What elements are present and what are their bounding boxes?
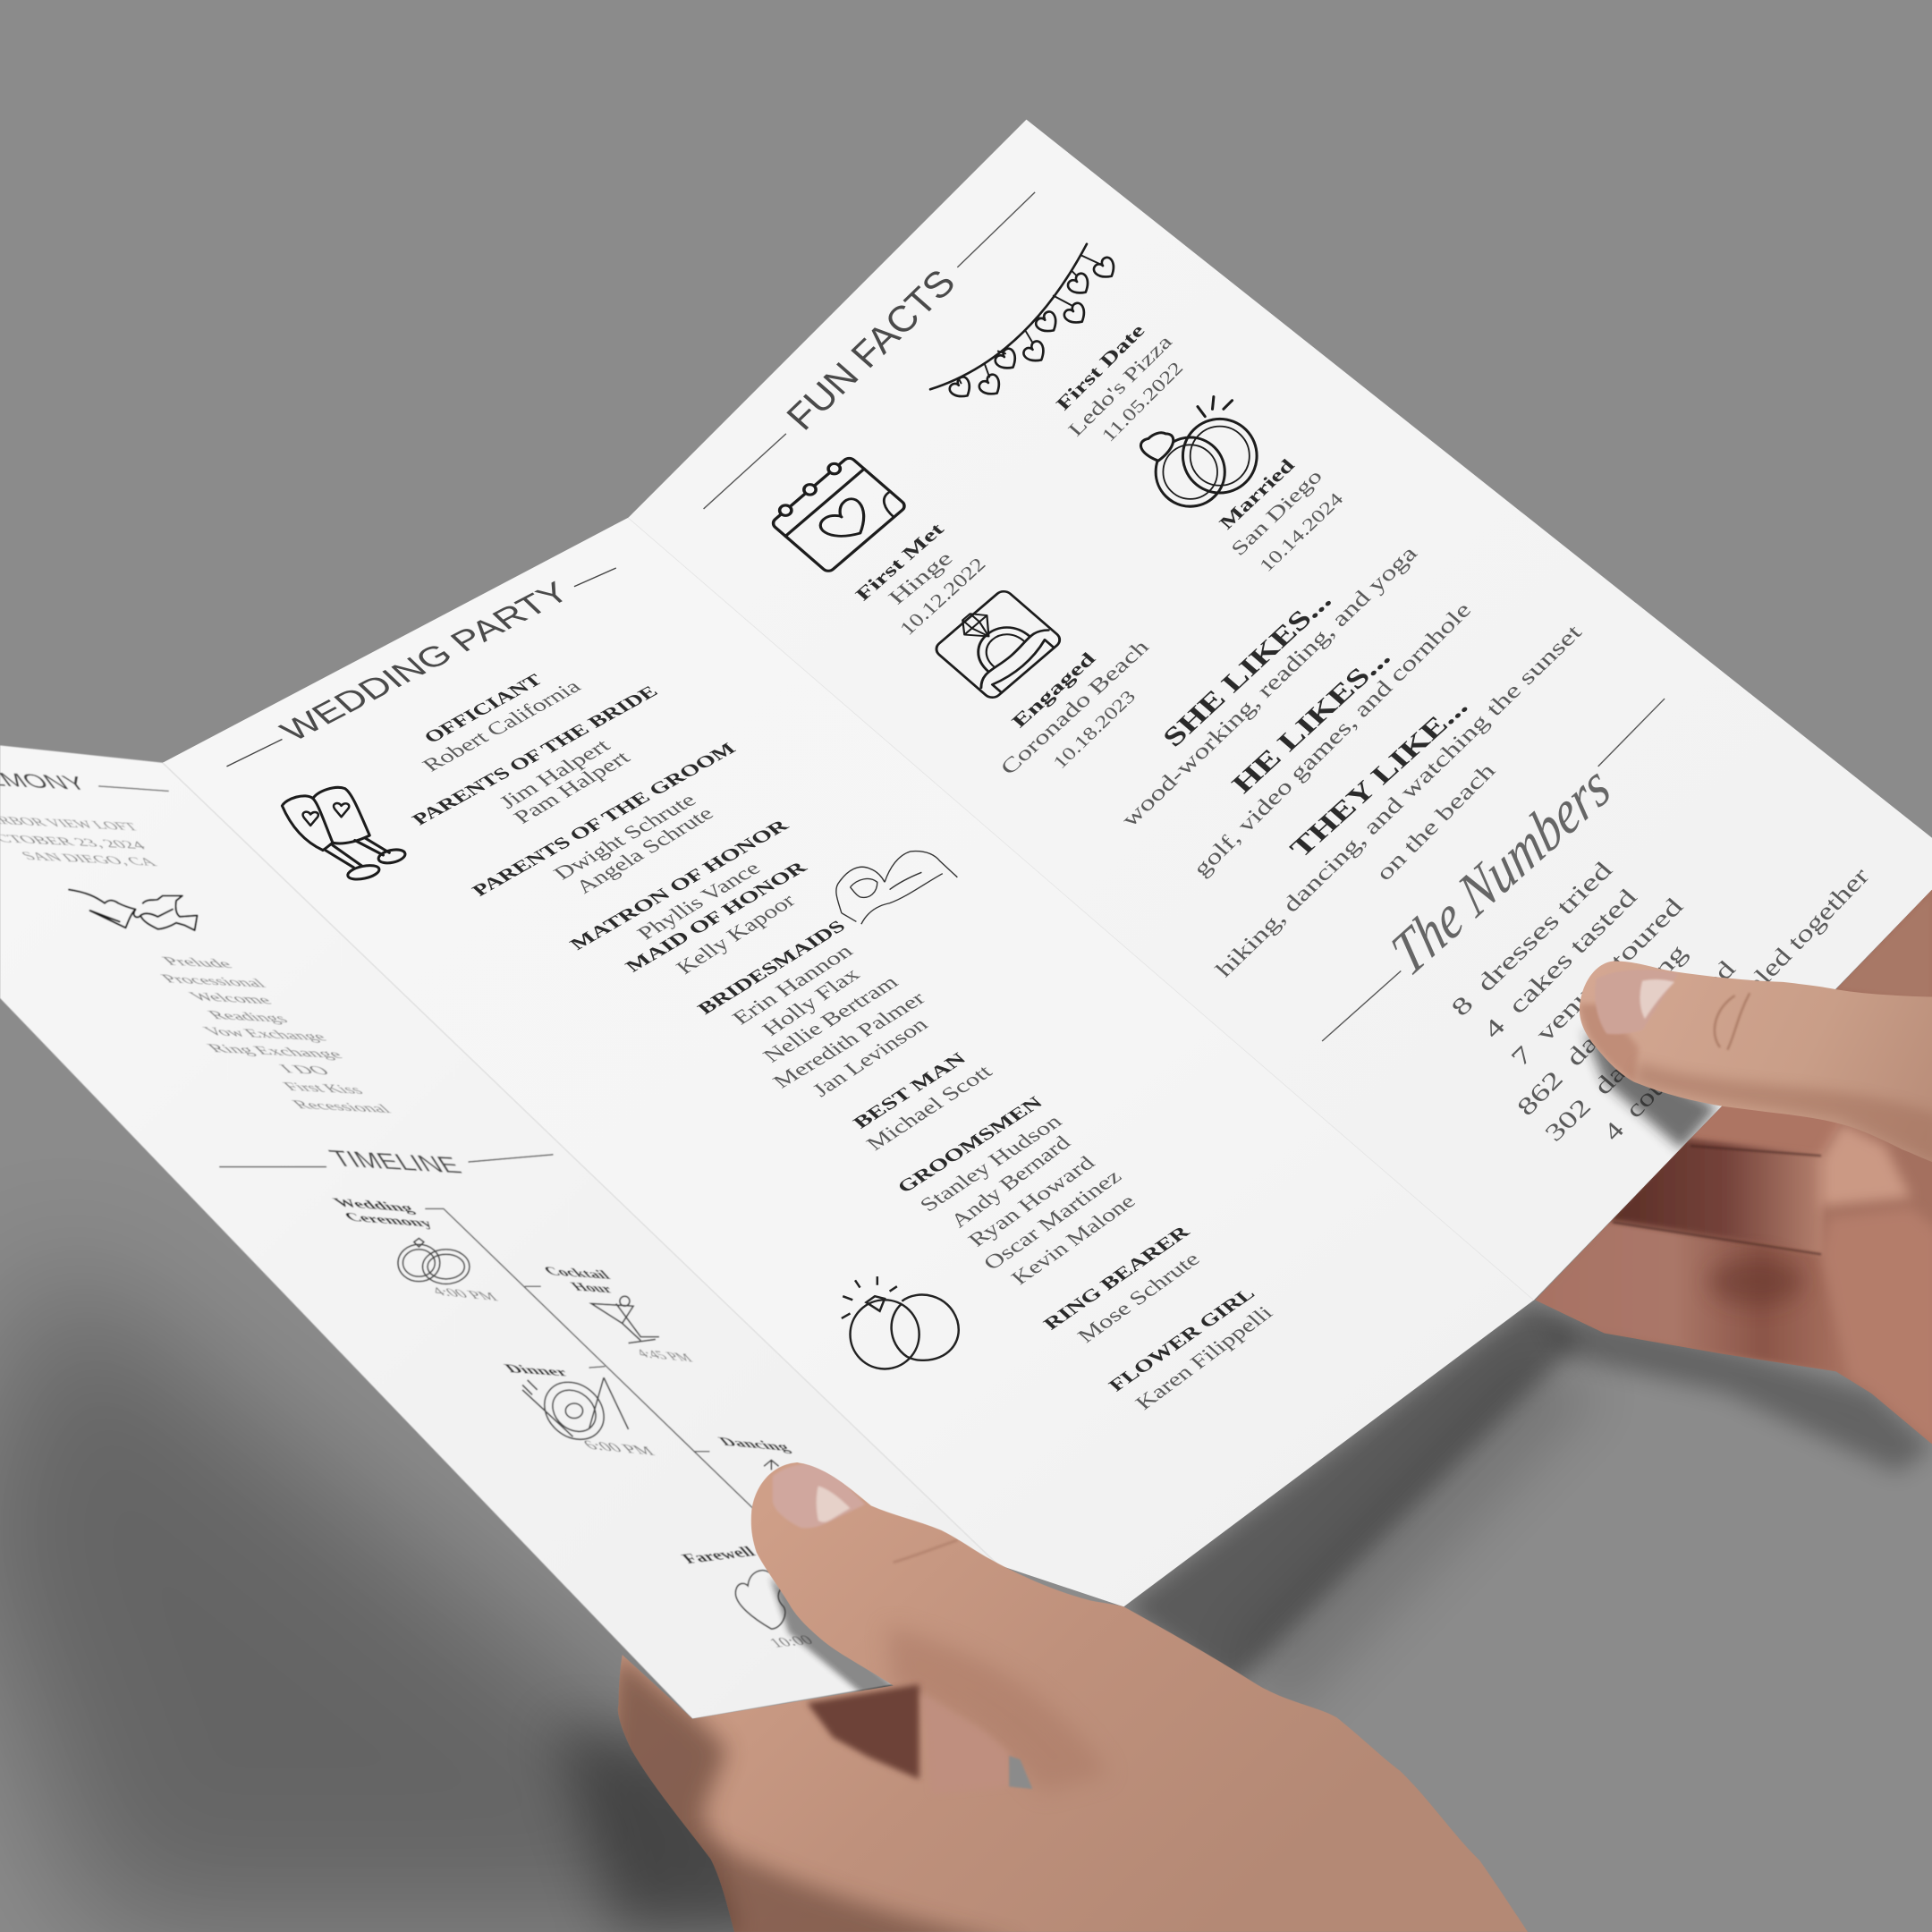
thumbnail — [773, 1464, 865, 1529]
knuckle segment lower — [1821, 1208, 1932, 1454]
venue details — [0, 812, 160, 869]
the numbers list: 4 cakes tasted — [1477, 884, 1642, 1043]
first met: 10.12.2022 — [894, 554, 990, 639]
bridesmaids: Holly Flax — [758, 964, 865, 1040]
event: dinner — [501, 1361, 658, 1459]
icon: calendar heart — [767, 453, 907, 573]
third finger — [1536, 1227, 1819, 1366]
first date — [1053, 321, 1187, 445]
event: wedding ceremony: 4:00 PM — [428, 1284, 502, 1304]
knuckle segment upper — [1821, 1123, 1911, 1207]
married: Married — [1216, 455, 1300, 533]
divider: wedding party left — [226, 740, 282, 767]
parents of the groom: Angela Schrute — [571, 803, 719, 898]
bridesmaids: Nellie Bertram — [758, 972, 903, 1067]
they like: THEY LIKE... — [1284, 692, 1474, 863]
order of service: Recessional — [288, 1098, 395, 1115]
event: cocktail hour: Hour — [567, 1280, 617, 1296]
event: cocktail hour: 4:45 PM — [632, 1346, 697, 1365]
order of service: Processional — [157, 972, 270, 990]
engaged: 10.18.2023 — [1049, 687, 1140, 773]
bridesmaids — [694, 918, 933, 1101]
first date: 11.05.2022 — [1098, 359, 1187, 445]
matron and maid of honor: MAID OF HONOR — [622, 858, 812, 976]
divider: numbers right — [1598, 699, 1665, 767]
married: San Diego — [1226, 465, 1326, 560]
parents of the groom: PARENTS OF THE GROOM — [469, 740, 741, 900]
she likes: SHE LIKES... — [1157, 586, 1337, 752]
first date: Ledo's Pizza — [1063, 331, 1176, 440]
matron and maid of honor — [566, 817, 812, 979]
upper knuckle — [1852, 909, 1926, 993]
married: 10.14.2024 — [1256, 490, 1348, 576]
right hand: fingers behind paper — [1528, 881, 1932, 1454]
thumb tip shade — [1580, 1004, 1639, 1081]
icon: engagement ring box — [931, 587, 1063, 700]
bridesmaids: Meredith Palmer — [768, 988, 931, 1092]
order of service: Ring Exchange — [203, 1042, 347, 1062]
paper shadow on background — [0, 1257, 1932, 1932]
they like: hiking, dancing, and watching the sunset — [1211, 621, 1587, 982]
thumb lower shading — [890, 1632, 1092, 1785]
ring bearer: RING BEARER — [1040, 1223, 1195, 1334]
first date: First Date — [1053, 321, 1149, 414]
first met: First Met — [852, 520, 948, 605]
matron and maid of honor: Phyllis Vance — [632, 859, 766, 944]
finger behind: dark — [807, 1684, 919, 1779]
icon: rings with diamond — [842, 1276, 959, 1368]
divider: fun facts right — [957, 192, 1035, 267]
order of service: I DO — [275, 1063, 335, 1078]
middle panel: wedding party — [163, 518, 1534, 1606]
parents of the bride — [409, 683, 662, 828]
best man: Michael Scott — [861, 1061, 998, 1155]
parents of the bride: Pam Halpert — [509, 748, 636, 828]
order of service — [157, 954, 395, 1115]
parents of the groom — [469, 740, 741, 900]
first met: Hinge — [884, 547, 958, 609]
bridesmaids: Erin Hannon — [727, 941, 859, 1029]
heading: the numbers: The Numbers — [1381, 750, 1621, 990]
divider: timeline right — [468, 1155, 554, 1162]
thumbnail — [1595, 970, 1678, 1034]
matron and maid of honor: Kelly Kapoor — [672, 890, 801, 979]
order of service: Welcome — [185, 990, 276, 1007]
thumb crease — [894, 1540, 957, 1563]
finger creases — [1613, 1146, 1821, 1254]
event: dinner: Dinner — [501, 1361, 572, 1379]
second finger — [1608, 1139, 1824, 1254]
event: cocktail hour: Cocktail — [540, 1265, 614, 1283]
event: wedding ceremony: Wedding — [329, 1196, 419, 1216]
the numbers list: 4 countries traveled together — [1597, 862, 1875, 1146]
dark finger shading — [1709, 1257, 1802, 1306]
right hand: thumb — [1575, 955, 1932, 1167]
best man — [850, 1050, 998, 1155]
groomsmen: Stanley Hudson — [915, 1111, 1067, 1216]
first met — [852, 520, 990, 639]
event: dancing — [715, 1435, 794, 1470]
engaged — [996, 636, 1154, 779]
groomsmen: Ryan Howard — [963, 1152, 1100, 1251]
gap between fingers — [1009, 1756, 1032, 1789]
icon: plate and cutlery — [522, 1370, 629, 1451]
lunula — [817, 1486, 851, 1522]
flower girl: FLOWER GIRL — [1106, 1284, 1259, 1395]
the numbers list: 7 venues toured — [1504, 893, 1689, 1071]
venue details: SAN DIEGO, CA — [17, 849, 160, 869]
bridesmaids: BRIDESMAIDS — [694, 918, 850, 1018]
flower girl — [1106, 1284, 1278, 1414]
divider: timeline left — [219, 1166, 326, 1168]
icon: dancing partial — [764, 1460, 779, 1470]
groomsmen: GROOMSMEN — [894, 1094, 1047, 1197]
icon: bunting hearts — [930, 244, 1120, 402]
matron and maid of honor: MATRON OF HONOR — [566, 817, 794, 953]
event: cocktail hour — [540, 1265, 697, 1365]
he likes — [1189, 598, 1476, 881]
heading: fun facts: FUN FACTS — [778, 262, 964, 438]
lunula — [1640, 979, 1674, 1019]
divider: ceremony — [98, 786, 169, 791]
hand shading bottom — [702, 1836, 1022, 1932]
parents of the bride: Jim Halpert — [495, 735, 616, 813]
thumb shadows on paper — [770, 1030, 1717, 1694]
flower girl: Karen Filippelli — [1131, 1302, 1278, 1414]
order of service: Vow Exchange — [199, 1025, 331, 1044]
icon: hands forming heart — [836, 852, 957, 924]
engaged: Coronado Beach — [996, 636, 1154, 779]
she likes: wood-working, reading, and yoga — [1117, 542, 1422, 832]
order of service: First Kiss — [279, 1080, 368, 1097]
groomsmen — [894, 1094, 1140, 1289]
thumb underside shade — [1634, 1062, 1932, 1165]
finger behind: pink — [921, 1693, 1009, 1794]
they like — [1211, 621, 1587, 982]
event: wedding ceremony — [329, 1196, 502, 1304]
order of service: Readings — [204, 1009, 292, 1025]
hand shading left — [617, 1655, 741, 1931]
parents of the groom: Dwight Schrute — [549, 790, 701, 884]
event: dinner: 6:00 PM — [579, 1438, 658, 1459]
engaged: Engaged — [1008, 648, 1100, 732]
icon: champagne flutes — [282, 787, 406, 882]
the numbers list: 8 dresses tried — [1445, 856, 1618, 1021]
the numbers list — [1445, 856, 1875, 1146]
groomsmen: Oscar Martinez — [979, 1166, 1127, 1275]
heading: timeline: TIMELINE — [325, 1146, 467, 1179]
icon: doves — [69, 890, 197, 930]
he likes: HE LIKES... — [1225, 643, 1396, 799]
divider: fun facts left — [704, 434, 786, 509]
event: farewell: 10:00 — [766, 1633, 818, 1650]
the numbers list: 862 days dating — [1511, 939, 1692, 1121]
icon: rings — [398, 1238, 470, 1284]
ring bearer — [1040, 1223, 1205, 1347]
event: farewell — [678, 1544, 818, 1650]
heading: wedding party: WEDDING PARTY — [273, 576, 577, 747]
icon: cocktail — [591, 1296, 659, 1343]
they like: on the beach — [1371, 758, 1501, 886]
timeline axis — [425, 1208, 754, 1510]
officiant: OFFICIANT — [420, 671, 547, 747]
best man: BEST MAN — [850, 1050, 970, 1132]
she likes — [1117, 542, 1422, 832]
right panel: fun facts — [629, 120, 1932, 1300]
icon: wedding rings with heart — [1140, 397, 1257, 506]
event: wedding ceremony: Ceremony — [341, 1210, 437, 1231]
divider: wedding party right — [574, 568, 616, 587]
event: farewell: Farewell — [678, 1544, 759, 1567]
married — [1216, 455, 1348, 576]
groomsmen: Andy Bernard — [946, 1132, 1076, 1232]
parents of the bride: PARENTS OF THE BRIDE — [409, 683, 662, 828]
left panel: ceremony and timeline — [0, 745, 998, 1719]
event: dancing: Dancing — [715, 1435, 794, 1454]
left hand: palm and thumb — [617, 1462, 1528, 1932]
divider: numbers left — [1322, 971, 1401, 1041]
officiant: Robert California — [418, 676, 587, 775]
bridesmaids: Jan Levinson — [808, 1014, 933, 1101]
the numbers list: 302 days engaged — [1538, 955, 1741, 1146]
ring bearer: Mose Schrute — [1073, 1249, 1205, 1347]
knuckle creases — [1715, 993, 1750, 1050]
first finger — [1696, 1106, 1835, 1149]
he likes: golf, video games, and cornhole — [1189, 598, 1476, 881]
fold lines — [163, 518, 1534, 1564]
order of service: Prelude — [158, 954, 237, 970]
icon: hearts — [735, 1571, 789, 1629]
groomsmen: Kevin Malone — [1006, 1191, 1140, 1289]
